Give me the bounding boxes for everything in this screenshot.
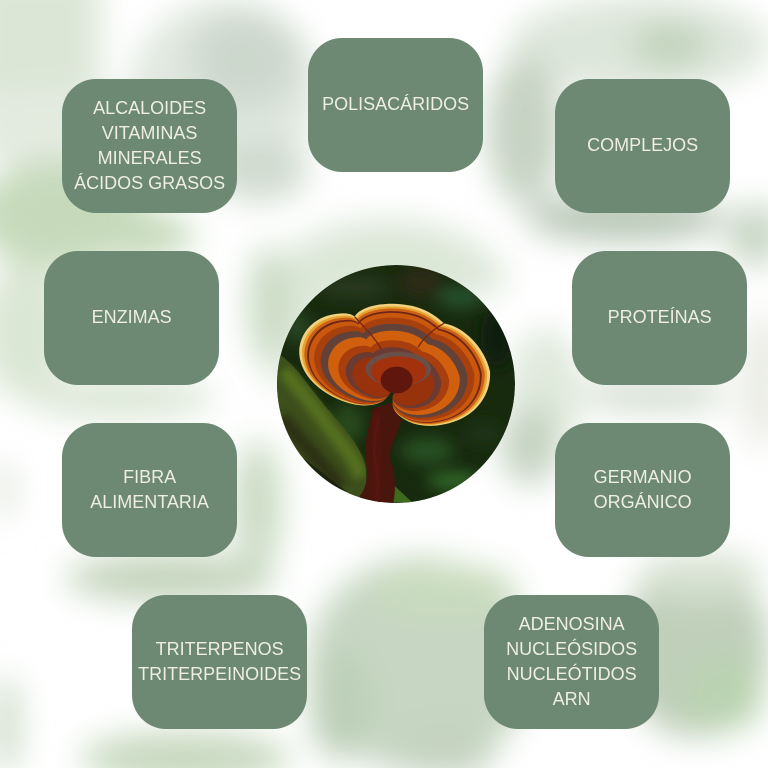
- stem: [359, 402, 401, 503]
- lobe creases: [355, 317, 381, 349]
- card: triterpenos, triterpeinoides: [132, 595, 307, 729]
- card: polisacáridos: POLISACÁRIDOS: [322, 94, 469, 114]
- card: proteínas: PROTEÍNAS: [608, 307, 712, 327]
- card: alcaloides, vitaminas, minerales, ácidos grasos: ÁCIDOS GRASOS: [74, 173, 225, 193]
- card: alcaloides, vitaminas, minerales, ácidos grasos: VITAMINAS: [102, 123, 197, 143]
- card: complejos: COMPLEJOS: [587, 135, 698, 155]
- card: germanio orgánico: [555, 423, 730, 557]
- card: triterpenos, triterpeinoides: TRITERPEINOIDES: [138, 664, 301, 684]
- forest backdrop: [277, 265, 515, 503]
- card: alcaloides, vitaminas, minerales, ácidos grasos: [62, 79, 237, 213]
- card: adenosina, nucleósidos, nucleótidos, ARN: NUCLEÓSIDOS: [506, 639, 637, 659]
- fan-shaped cap with concentric rings: [299, 304, 490, 426]
- card: triterpenos, triterpeinoides: TRITERPENOS: [156, 639, 284, 659]
- card: fibra alimentaria: ALIMENTARIA: [90, 492, 209, 512]
- card: alcaloides, vitaminas, minerales, ácidos grasos: MINERALES: [98, 148, 202, 168]
- card: adenosina, nucleósidos, nucleótidos, ARN: NUCLEÓTIDOS: [507, 664, 637, 684]
- card: adenosina, nucleósidos, nucleótidos, ARN: [484, 595, 659, 729]
- card: enzimas: ENZIMAS: [92, 307, 172, 327]
- central funnel: [366, 352, 431, 386]
- card: polisacáridos: [308, 38, 483, 172]
- card: alcaloides, vitaminas, minerales, ácidos grasos: ALCALOIDES: [93, 98, 206, 118]
- card: germanio orgánico: ORGÁNICO: [594, 492, 692, 512]
- card: proteínas: [572, 251, 747, 385]
- card: fibra alimentaria: [62, 423, 237, 557]
- card: enzimas: [44, 251, 219, 385]
- card: germanio orgánico: GERMANIO: [594, 467, 692, 487]
- card: fibra alimentaria: FIBRA: [123, 467, 176, 487]
- card: complejos: [555, 79, 730, 213]
- card: adenosina, nucleósidos, nucleótidos, ARN: ADENOSINA: [519, 614, 625, 634]
- mossy trunk: [264, 352, 412, 502]
- card: adenosina, nucleósidos, nucleótidos, ARN: ARN: [553, 689, 591, 709]
- central circular mushroom photo: [277, 265, 515, 503]
